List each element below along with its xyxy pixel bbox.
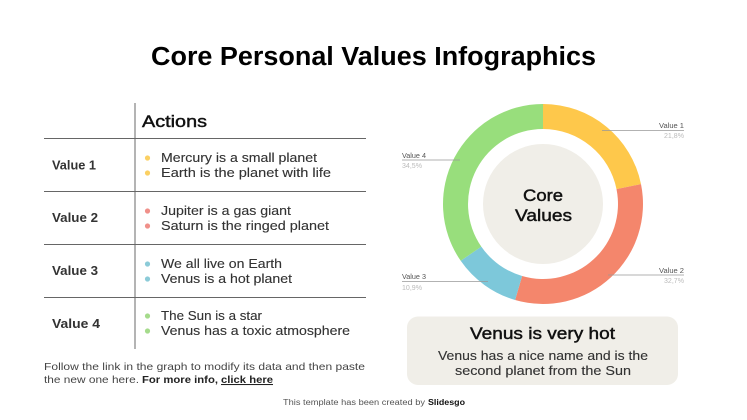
callout: value 2: 32,7% (664, 278, 684, 285)
text block: footnote: click here (221, 374, 273, 386)
callout: value 1: Value 1 (659, 123, 684, 130)
row: value 1: Earth is the planet with life (161, 165, 331, 180)
row: value 3: Value 3 (52, 264, 98, 278)
row: value 3: Venus is a hot planet (161, 271, 292, 286)
callout: value 1 (602, 123, 684, 140)
text block: footnote: For more info, (142, 374, 218, 386)
row: value 2: Saturn is the ringed planet (161, 218, 329, 233)
text block: credit: Slidesgo (428, 398, 465, 407)
segment: value 2 (515, 184, 643, 304)
callout: value 4: Value 4 (402, 153, 426, 160)
row: value 4: Value 4 (52, 317, 100, 331)
center circle: core values: Core (523, 186, 563, 205)
callout: value 4 (402, 153, 460, 170)
text block: footnote (44, 361, 365, 386)
center circle: core values: Values (515, 206, 572, 225)
table heading: actions: Actions (142, 112, 207, 131)
callout: value 3: 10,9% (402, 285, 422, 292)
row: value 4 (52, 308, 350, 338)
row: value 3 (52, 256, 292, 286)
callout text (438, 349, 648, 378)
callout: value 2: Value 2 (659, 268, 684, 275)
panel: venus callout (407, 316, 678, 385)
text block: credit: This template has been created by (283, 398, 425, 407)
row: value 3: We all live on Earth (161, 256, 282, 271)
callout text: second planet from the Sun (455, 364, 631, 378)
row: value 1: Mercury is a small planet (161, 150, 317, 165)
text block: footnote: the new one here. (44, 374, 139, 386)
row: value 4: Venus has a toxic atmosphere (161, 323, 350, 338)
row: value 2: Value 2 (52, 211, 98, 225)
text block: footnote: Follow the link in the graph to modify its data and then paste (44, 361, 365, 373)
callout: value 3: Value 3 (402, 274, 426, 281)
callout: value 4: 34,5% (402, 163, 422, 170)
title: Core Personal Values Infographics (151, 43, 596, 71)
chart: donut of core values (402, 104, 684, 304)
text block: credit (283, 398, 465, 407)
callout: value 3 (402, 274, 488, 292)
row: value 1: Value 1 (52, 158, 96, 172)
segment: value 3 (461, 247, 522, 300)
callout heading: Venus is very hot (470, 325, 615, 343)
callout text: Venus has a nice name and is the (438, 349, 648, 363)
row: value 2 (52, 203, 329, 233)
row: value 1 (52, 150, 331, 180)
callout: value 1: 21,8% (664, 133, 684, 140)
segment: value 4 (443, 104, 543, 261)
panel: actions table (44, 103, 366, 349)
row: value 2: Jupiter is a gas giant (161, 203, 291, 218)
segment: value 1 (543, 104, 641, 189)
callout: value 2 (608, 268, 684, 285)
center circle: core values (483, 144, 603, 264)
row: value 4: The Sun is a star (161, 308, 263, 323)
